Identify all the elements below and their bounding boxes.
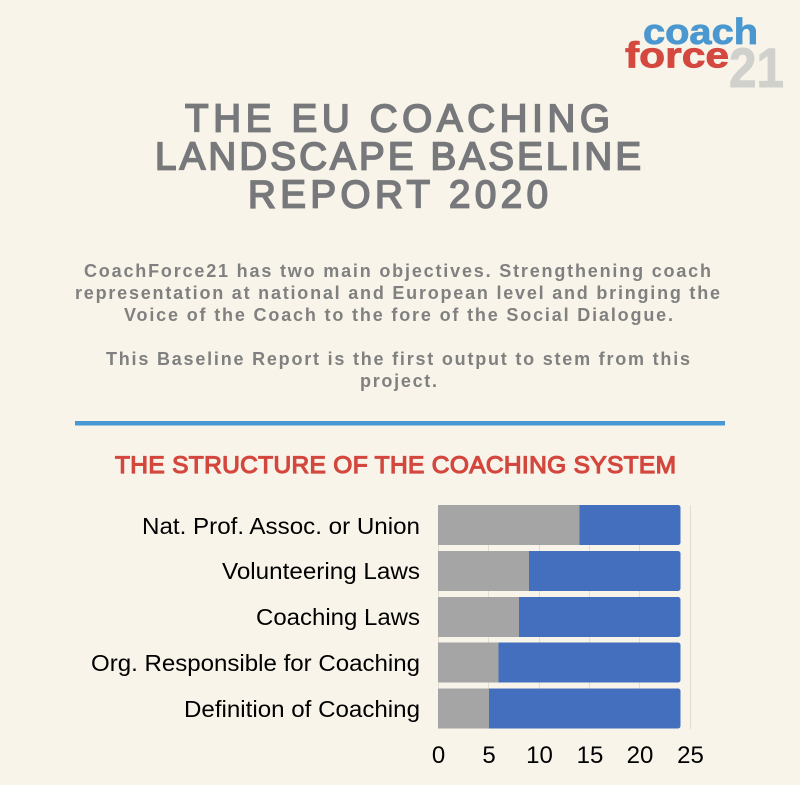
bar: Coaching Laws [438, 597, 680, 637]
intro text block: CoachForce21 has two main objectives. Strengthening coach [84, 261, 711, 281]
logo: CoachForce21: coach [643, 11, 758, 52]
category labels: Coaching Laws [256, 604, 420, 630]
stacked bar chart [91, 505, 704, 769]
intro text block: Voice of the Coach to the fore of the Social Dialogue. [124, 305, 673, 325]
axis labels: 25 [677, 742, 704, 769]
intro text block: This Baseline Report is the first output to stem from this [106, 349, 690, 369]
category labels [91, 513, 420, 722]
title: LANDSCAPE BASELINE [155, 136, 641, 178]
title: REPORT 2020 [248, 174, 548, 216]
logo: CoachForce21 [625, 11, 784, 99]
bar: Definition of Coaching [438, 688, 680, 728]
category labels: Nat. Prof. Assoc. or Union [142, 513, 420, 539]
title [155, 98, 641, 216]
bar: Nat. Prof. Assoc. or Union [438, 505, 680, 545]
bar: Org. Responsible for Coaching [438, 642, 680, 682]
logo: CoachForce21: 21 [729, 36, 784, 99]
category labels: Volunteering Laws [222, 558, 420, 584]
intro text block: project. [360, 371, 437, 391]
category labels: Org. Responsible for Coaching [91, 650, 420, 676]
category labels: Definition of Coaching [184, 696, 420, 722]
intro text block [75, 261, 720, 391]
bar: Volunteering Laws [438, 551, 680, 591]
intro text block: representation at national and European level and bringing the [75, 283, 720, 303]
chart heading: THE STRUCTURE OF THE COACHING SYSTEM [115, 452, 676, 479]
axis labels: 5 [482, 742, 496, 769]
logo: CoachForce21: force [625, 34, 729, 76]
axis labels: 10 [526, 742, 553, 769]
axis labels [432, 742, 704, 769]
title: THE EU COACHING [185, 98, 610, 140]
axis labels: 20 [627, 742, 653, 769]
axis labels: 15 [577, 742, 603, 769]
axis labels: 0 [432, 742, 445, 769]
